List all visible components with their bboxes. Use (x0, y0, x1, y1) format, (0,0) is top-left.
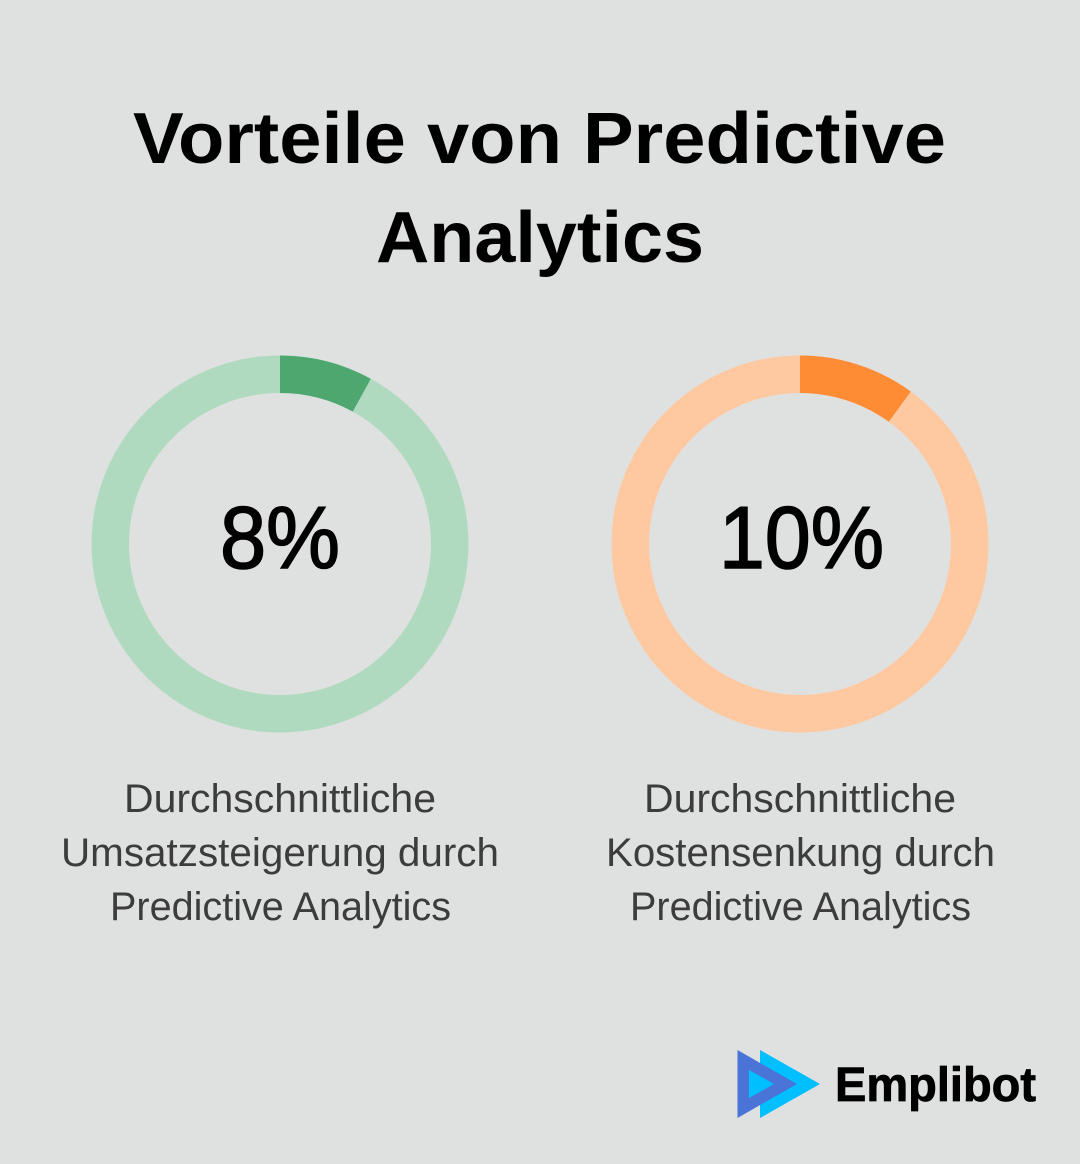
donut chart: 10% (630, 356, 970, 714)
label: costs: Predictive Analytics (630, 885, 971, 929)
label: revenue: Predictive Analytics (110, 885, 451, 929)
label: costs: Durchschnittliche (644, 777, 956, 821)
panel: cost reduction (606, 356, 995, 929)
value: 8%: 8% (220, 488, 340, 587)
panel: revenue increase (61, 356, 499, 929)
value: 10%: 10% (719, 488, 884, 587)
label: revenue (61, 777, 499, 929)
title: Analytics (376, 198, 704, 278)
logo: Emplibot (738, 1050, 1036, 1118)
title (133, 99, 946, 278)
title: Vorteile von Predictive (133, 99, 946, 179)
label: costs (606, 777, 995, 929)
icon: play triangles (738, 1050, 820, 1118)
label: costs: Kostensenkung durch (606, 831, 995, 875)
label: revenue: Durchschnittliche (124, 777, 436, 821)
wordmark: Emplibot (835, 1059, 1036, 1112)
label: revenue: Umsatzsteigerung durch (61, 831, 499, 875)
donut chart: 8% (110, 356, 450, 714)
